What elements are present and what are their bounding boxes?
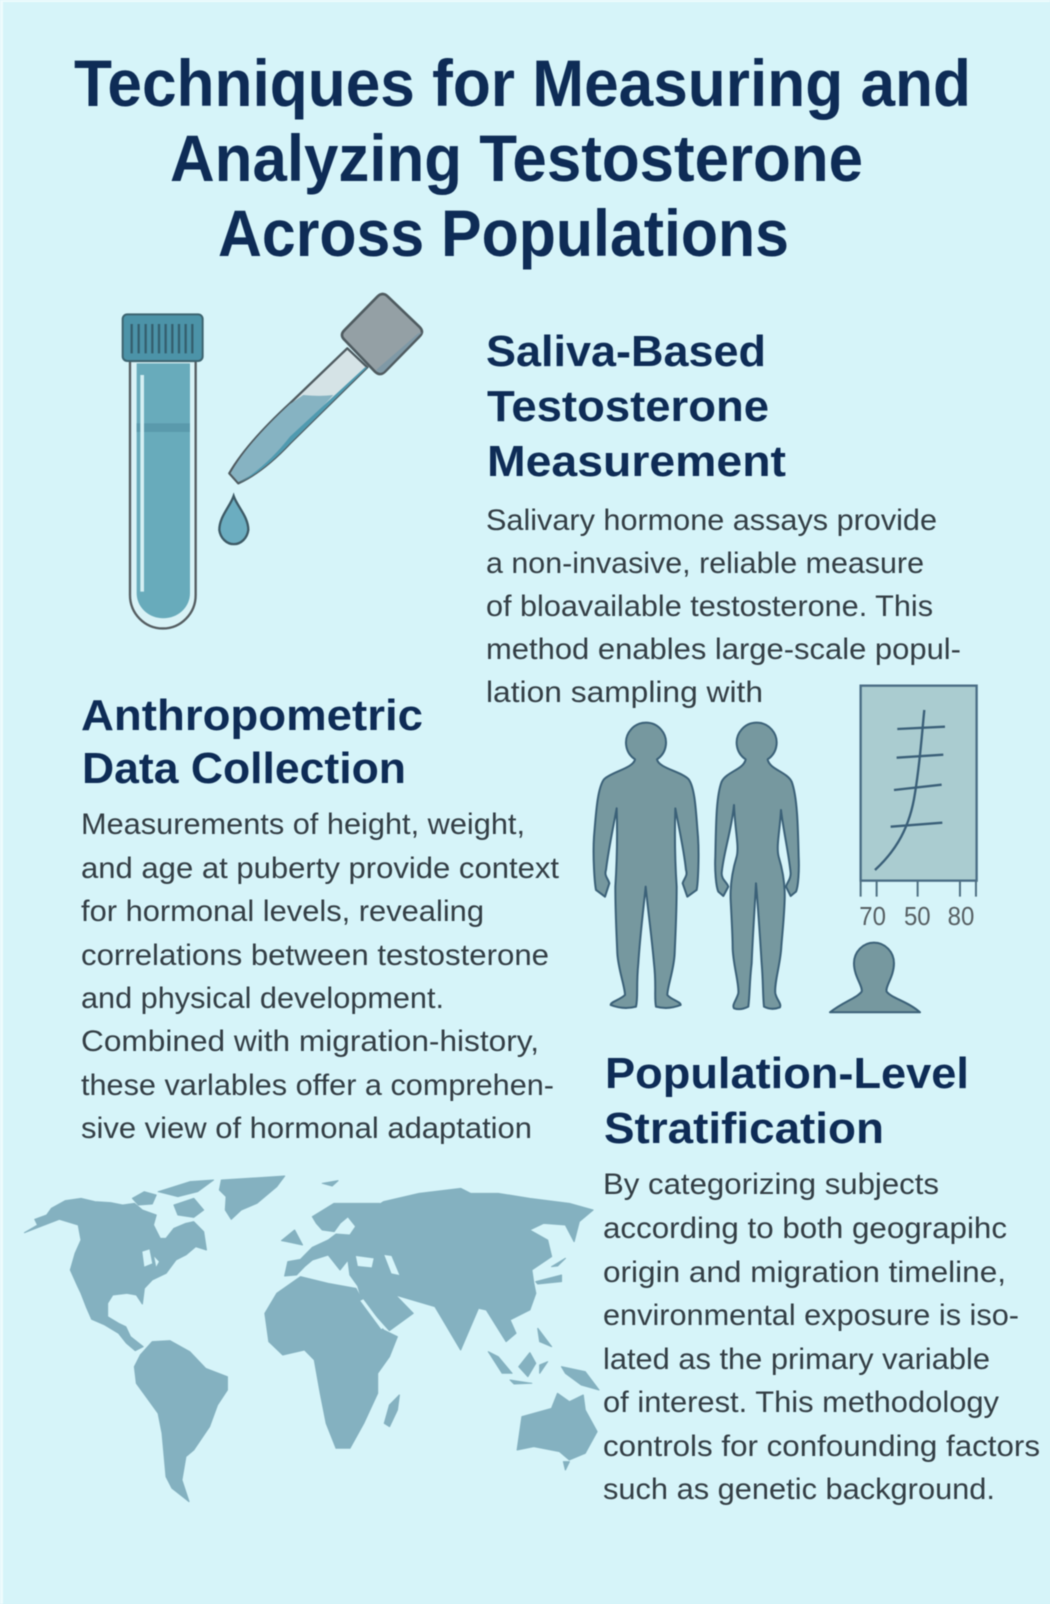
icon: falling drop (219, 496, 248, 544)
title: Techniques for Measuring and (74, 46, 971, 120)
arctic islands (132, 1180, 214, 1217)
section: population-level stratification: controls for confounding factors (603, 1430, 1040, 1463)
section: population-level stratification: Stratification (604, 1104, 884, 1153)
red sea (362, 1300, 383, 1328)
icon: test tube (123, 314, 203, 628)
icon: male body silhouette (594, 723, 699, 1008)
great lakes (142, 1249, 159, 1267)
australia (517, 1393, 597, 1470)
south america (134, 1341, 227, 1502)
southeast asia islands (488, 1328, 599, 1390)
chart: growth curve (859, 686, 977, 931)
greenland and iceland (219, 1176, 338, 1219)
section: anthropometric data collection: these varlables offer a comprehen- (81, 1069, 554, 1102)
section: population-level stratification: lated as the primary variable (603, 1343, 990, 1376)
section: saliva-based measurement: Salivary hormone assays provide (486, 504, 937, 537)
section: population-level stratification: of interest. This methodology (603, 1386, 999, 1419)
chart: growth curve: 50 (904, 901, 931, 931)
section: saliva-based measurement: Measurement (487, 437, 786, 486)
section: anthropometric data collection: Data Collection (82, 744, 406, 793)
chart: growth curve: 70 (859, 901, 886, 931)
section: saliva-based measurement: of bloavailable testosterone. This (486, 590, 933, 623)
section: anthropometric data collection: and age at puberty provide context (81, 852, 560, 885)
world map (25, 1176, 599, 1502)
title: Across Populations (218, 196, 789, 270)
section: anthropometric data collection: and physical development. (81, 982, 444, 1015)
section: anthropometric data collection: Combined with migration-history, (81, 1025, 539, 1058)
section: anthropometric data collection: Anthropometric (81, 691, 423, 740)
section: anthropometric data collection: for hormonal levels, revealing (81, 895, 484, 928)
chart: growth curve: 80 (948, 901, 974, 931)
title (74, 46, 971, 270)
north america (25, 1198, 206, 1351)
icon: female body silhouette (715, 723, 799, 1009)
section: population-level stratification: according to both geograpihc (603, 1212, 1007, 1245)
section: saliva-based measurement: a non-invasive, reliable measure (486, 547, 924, 580)
section: population-level stratification: By categorizing subjects (603, 1168, 939, 1201)
section: population-level stratification: such as genetic background. (603, 1473, 995, 1506)
icon: dropper with drop (219, 294, 422, 544)
section: population-level stratification: Population-Level (605, 1049, 969, 1098)
section: anthropometric data collection: sive view of hormonal adaptation (81, 1112, 532, 1145)
icon: head and shoulders bust (830, 943, 920, 1012)
eurasia (285, 1188, 593, 1350)
section: saliva-based measurement: method enables large-scale popul- (486, 633, 961, 666)
inland seas (356, 1255, 399, 1275)
section: anthropometric data collection: Measurements of height, weight, (81, 808, 525, 841)
japan (536, 1258, 565, 1284)
africa (265, 1277, 397, 1448)
title: Analyzing Testosterone (170, 121, 863, 195)
united kingdom (282, 1230, 302, 1245)
scandinavia (312, 1203, 380, 1232)
section: population-level stratification (603, 1049, 1040, 1506)
section: saliva-based measurement: Saliva-Based (486, 327, 766, 376)
section: saliva-based measurement: lation sampling with (486, 676, 763, 709)
madagascar (384, 1395, 399, 1427)
section: saliva-based measurement: Testosterone (487, 382, 769, 431)
section: population-level stratification: origin and migration timeline, (603, 1256, 1006, 1289)
section: anthropometric data collection: correlations between testosterone (81, 939, 549, 972)
section: population-level stratification: environmental exposure is iso- (603, 1299, 1019, 1332)
section: anthropometric data collection (81, 691, 560, 1145)
section: saliva-based measurement (486, 327, 961, 709)
